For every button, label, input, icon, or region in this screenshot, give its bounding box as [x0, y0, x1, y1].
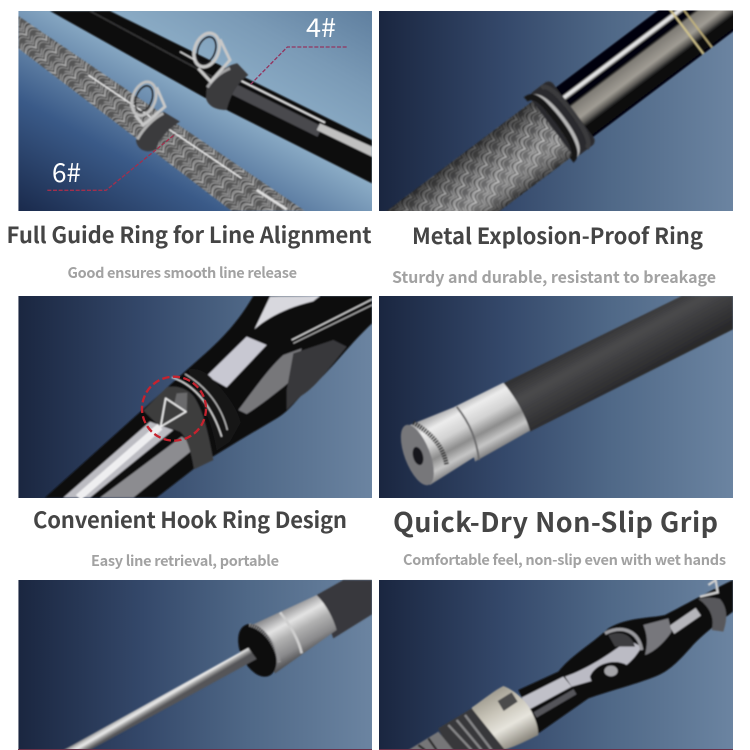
heading: convenient hook ring: Convenient Hook Ring Design — [33, 503, 347, 535]
heading: full guide ring: Full Guide Ring for Line Alignment — [6, 218, 372, 250]
metal ring — [525, 79, 597, 161]
label: 6#: 6# — [52, 153, 81, 190]
decorative bottom edge of photos — [18, 749, 733, 750]
panel: reel seat photo — [379, 580, 733, 750]
wrap band — [143, 369, 241, 469]
leader line 4# — [250, 47, 347, 85]
leader line 6# — [47, 134, 175, 190]
label: 4#: 4# — [306, 8, 336, 45]
glossy rod body — [45, 296, 372, 498]
panel: quick-dry grip photo — [379, 296, 733, 498]
matte rod — [503, 296, 733, 432]
knurled collar and thread — [408, 708, 505, 750]
callout: red dashed circle — [142, 377, 206, 441]
glossy handle — [518, 580, 733, 733]
panel: explosion-proof ring photo — [379, 10, 733, 211]
silver shaft — [63, 648, 257, 750]
heading: metal explosion-proof ring: Metal Explosion-Proof Ring — [412, 219, 703, 251]
metal nut — [472, 686, 538, 750]
panel: butt section photo — [18, 580, 372, 750]
glossy black section — [555, 10, 733, 138]
panel: guide ring photo — [18, 11, 372, 211]
text: good ensures smooth release: Good ensures smooth line release — [68, 262, 297, 283]
silver butt cap — [394, 383, 530, 489]
text: easy line retrieval: Easy line retrieval, portable — [91, 550, 279, 571]
guide ring 6# — [127, 79, 165, 125]
text: sturdy and durable: Sturdy and durable, resistant to breakage — [392, 264, 716, 288]
textured grip section — [387, 101, 572, 211]
panel: hook ring photo — [18, 296, 372, 498]
guide ring 4# — [180, 30, 230, 82]
icon: triangular hook — [161, 398, 186, 427]
black rod — [50, 11, 372, 183]
textured gray rod — [18, 16, 305, 211]
matte rod end — [317, 580, 372, 638]
silver cap — [237, 594, 338, 678]
guide at top right — [698, 580, 726, 632]
heading: quick-dry non-slip grip: Quick-Dry Non-Slip Grip — [393, 501, 718, 540]
text: comfortable feel: Comfortable feel, non-slip even with wet hands — [403, 549, 726, 570]
